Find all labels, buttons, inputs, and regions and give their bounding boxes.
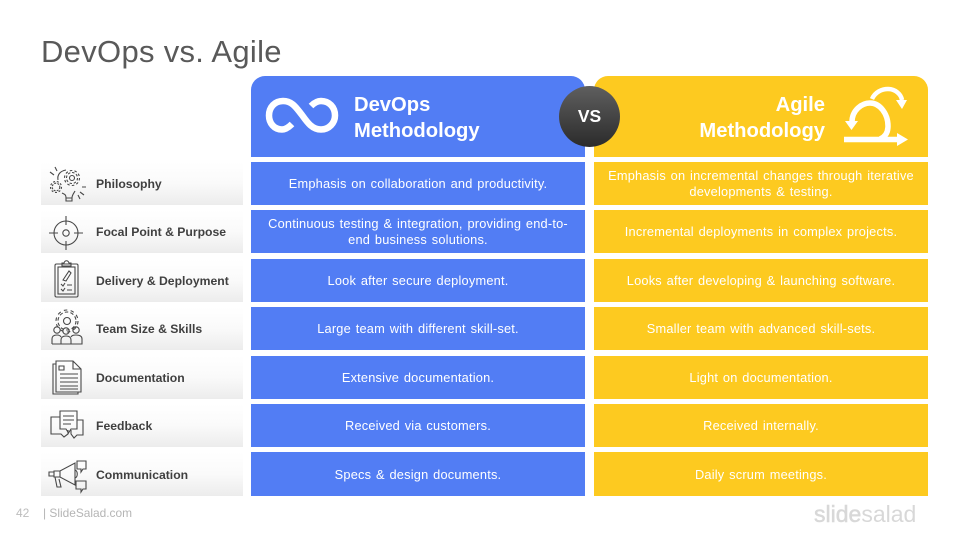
cell: DevOps focal point — [251, 210, 585, 253]
row label: Team Size & Skills — [41, 307, 243, 350]
badge: VS — [559, 86, 620, 147]
icon: agile sprint loop — [844, 86, 908, 146]
page number: 42 — [16, 506, 29, 520]
cell: Agile delivery — [594, 259, 928, 302]
icon: lightbulb with gears — [50, 166, 86, 202]
cell: Agile team: Smaller team with advanced skill-sets. — [647, 321, 875, 336]
panel: DevOps header — [251, 76, 585, 157]
cell: DevOps feedback — [251, 404, 585, 447]
heading: DevOps Methodology — [354, 94, 480, 142]
cell: DevOps focal point: end business solutions. — [348, 232, 488, 247]
cell: Agile philosophy: Emphasis on incremental changes through iterative — [608, 168, 914, 183]
row label: Delivery & Deployment: Delivery & Deployment — [96, 274, 229, 288]
icon: clipboard — [54, 260, 79, 298]
cell: DevOps delivery: Look after secure deployment. — [328, 273, 508, 288]
cell: Agile delivery: Looks after developing & launching software. — [627, 273, 895, 288]
row label: Philosophy: Philosophy — [96, 177, 162, 191]
row label: Communication: Communication — [96, 468, 188, 482]
cell: Agile communication: Daily scrum meetings. — [695, 466, 827, 482]
cell: DevOps communication: Specs & design documents. — [335, 466, 501, 482]
icon: speech bubbles — [50, 410, 84, 439]
title: DevOps vs. Agile — [41, 34, 282, 69]
cell: Agile feedback: Received internally. — [703, 418, 819, 433]
row label: Philosophy — [41, 162, 243, 205]
cell: DevOps documentation — [251, 356, 585, 399]
heading: Agile Methodology — [699, 94, 825, 142]
cell: Agile team — [594, 307, 928, 350]
cell: Agile feedback — [594, 404, 928, 447]
heading: Agile Methodology: Methodology — [699, 120, 825, 142]
icon: infinity — [266, 98, 338, 133]
cell: DevOps philosophy: Emphasis on collaboration and productivity. — [289, 176, 547, 191]
row label: Documentation: Documentation — [96, 371, 185, 385]
cell: DevOps team — [251, 307, 585, 350]
cell: Agile focal point: Incremental deployments in complex projects. — [625, 224, 897, 239]
cell: DevOps focal point: Continuous testing & integration, providing end-to- — [268, 216, 568, 231]
icon: target — [49, 216, 83, 250]
cell: Agile communication — [594, 452, 928, 496]
heading: Agile Methodology: Agile — [776, 94, 825, 116]
cell: Agile documentation — [594, 356, 928, 399]
icon: team with gear — [51, 310, 83, 344]
heading: DevOps Methodology: Methodology — [354, 120, 480, 142]
row label: Team Size & Skills: Team Size & Skills — [96, 322, 202, 336]
heading: DevOps Methodology: DevOps — [354, 94, 430, 116]
row label: Delivery & Deployment — [41, 259, 243, 302]
cell: Agile focal point — [594, 210, 928, 253]
row label: Feedback — [41, 404, 243, 447]
row label: Communication — [41, 452, 243, 496]
row label: Focal Point & Purpose: Focal Point & Purpose — [96, 225, 226, 239]
cell: DevOps feedback: Received via customers. — [345, 418, 491, 433]
cell: DevOps philosophy — [251, 162, 585, 205]
badge: VS: VS — [578, 106, 601, 126]
icon: megaphone — [48, 460, 87, 494]
row label: Documentation — [41, 356, 243, 399]
row label: Focal Point & Purpose — [41, 210, 243, 253]
row label: Feedback: Feedback — [96, 419, 152, 433]
cell: DevOps team: Large team with different skill-set. — [317, 321, 519, 336]
footer logo: slidesalad — [814, 501, 916, 527]
cell: DevOps delivery — [251, 259, 585, 302]
panel: Agile header — [594, 76, 928, 157]
footer site name: | SlideSalad.com — [43, 506, 132, 520]
cell: Agile documentation: Light on documentation. — [689, 370, 833, 385]
cell: Agile philosophy — [594, 162, 928, 205]
icon: document — [52, 360, 82, 394]
cell: Agile philosophy: developments & testing. — [689, 184, 833, 199]
cell: DevOps documentation: Extensive documentation. — [342, 370, 494, 385]
cell: DevOps communication — [251, 452, 585, 496]
